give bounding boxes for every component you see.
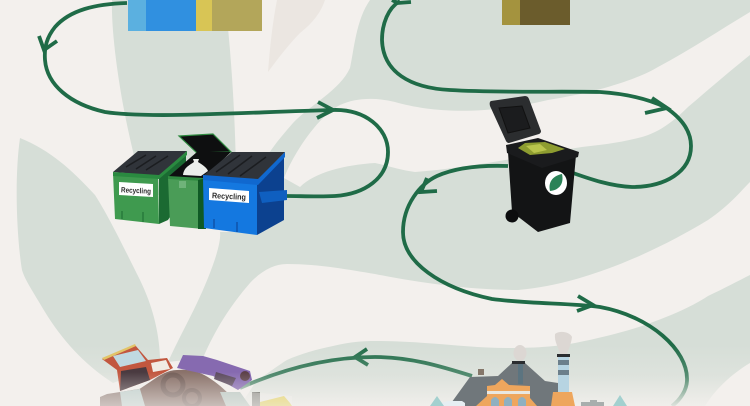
green dumpster left [113, 151, 187, 224]
pale rubble block [120, 389, 145, 406]
leaf badge [545, 171, 567, 195]
factory and coal mound [430, 332, 627, 406]
route: top left box to dumpsters [45, 3, 388, 196]
chimney [551, 354, 575, 406]
box top right [502, 0, 570, 25]
small outbuildings [581, 400, 604, 406]
grey debris [220, 392, 250, 406]
bin lid [490, 96, 541, 143]
arrowheads [39, 0, 667, 365]
route: top right box past bin [382, 1, 691, 187]
green dumpster middle with open lid and bag [168, 134, 231, 229]
factory building [476, 379, 537, 406]
grey rubble [100, 388, 145, 406]
bin body [508, 152, 576, 232]
route: factory to scrap heap [240, 357, 472, 388]
yellow machine [260, 396, 292, 406]
green dumpster left: Recycling [121, 185, 152, 196]
black compost bin [490, 96, 579, 232]
blue dumpster right [203, 152, 287, 235]
heap haze [100, 372, 292, 406]
coal mound [449, 363, 558, 406]
wheel [506, 210, 518, 222]
blue dumpster right: Recycling [212, 191, 246, 202]
leaf contents [518, 142, 565, 155]
palm foliage [430, 395, 627, 406]
faint pale leaf accent [268, 0, 325, 72]
smoke plumes [514, 345, 526, 361]
purple car [177, 355, 252, 390]
recycling dumpsters [113, 134, 287, 235]
small white building [441, 401, 465, 406]
route: bin down to factory [403, 166, 687, 406]
scrap heap [100, 344, 292, 406]
tyre mound [135, 370, 240, 406]
red car [102, 344, 173, 391]
bottom fog fade [0, 345, 750, 406]
boxes top left [128, 0, 262, 31]
